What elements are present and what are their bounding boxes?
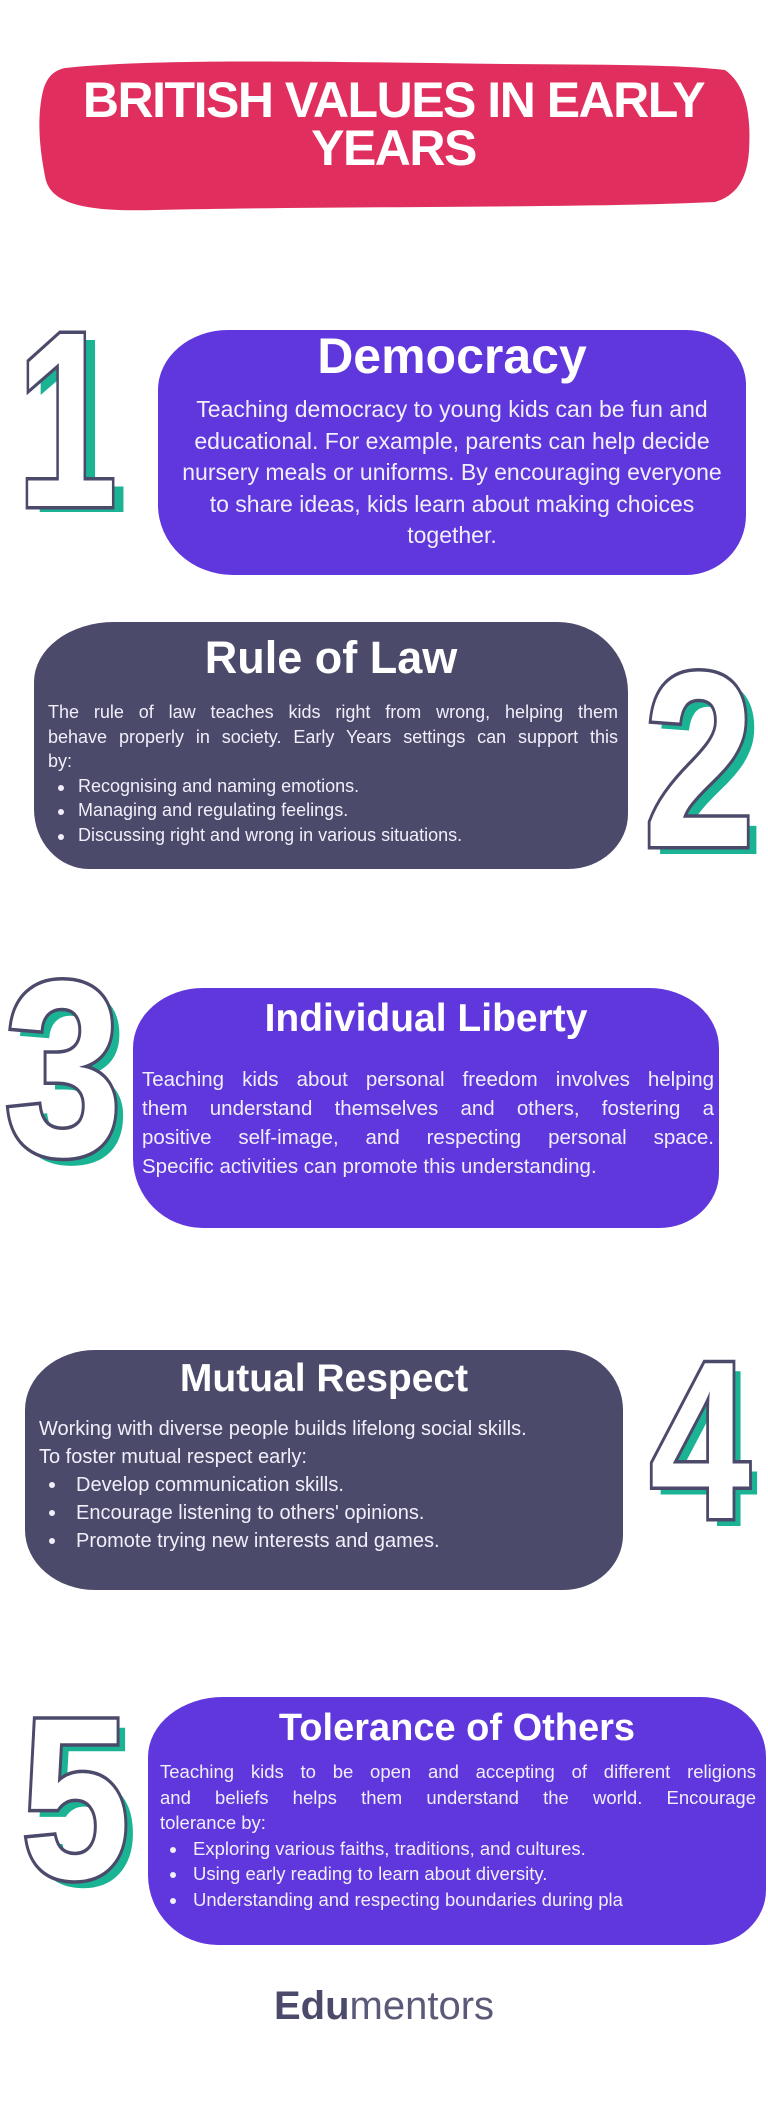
heading: individual liberty: Individual Liberty [265, 997, 587, 1040]
panel: democracy [158, 330, 746, 575]
panel: tolerance of others [148, 1697, 766, 1945]
text: individual liberty: them understand themselves and others, fostering a [142, 1097, 714, 1120]
number 5: 5 [21, 1671, 130, 1928]
number 1: 1 [28, 287, 128, 566]
text: rule of law: behave properly in society. Early Years settings can support this [48, 726, 618, 746]
text: rule of law: Managing and regulating feelings. [78, 800, 348, 820]
text: mutual respect: Promote trying new interests and games. [76, 1530, 440, 1552]
heading: mutual respect: Mutual Respect [180, 1357, 468, 1400]
title banner [39, 62, 750, 210]
heading: rule of law: Rule of Law [205, 632, 457, 683]
number 1: 1 [17, 281, 117, 560]
title text: YEARS [311, 120, 476, 176]
text: mutual respect: Develop communication skills. [76, 1474, 344, 1496]
text: tolerance of others: and beliefs helps them understand the world. Encourage [160, 1786, 756, 1808]
text: individual liberty: Teaching kids about personal freedom involves helping [142, 1068, 714, 1091]
text: democracy: to share ideas, kids learn about making choices [210, 490, 694, 516]
number 3: 3 [4, 930, 122, 1209]
heading: tolerance of others: Tolerance of Others [279, 1707, 635, 1749]
text: individual liberty: positive self-image, and respecting personal space. [142, 1126, 714, 1149]
panel: mutual respect [25, 1350, 623, 1590]
number 3: 3 [13, 938, 131, 1217]
text: tolerance of others: Understanding and respecting boundaries during pla [193, 1888, 623, 1910]
text: mutual respect: To foster mutual respect early: [39, 1446, 307, 1468]
text: democracy: educational. For example, parents can help decide [194, 428, 710, 454]
number 5: 5 [30, 1679, 138, 1936]
text: individual liberty: Specific activities can promote this understanding. [142, 1155, 597, 1178]
text: mutual respect: Working with diverse people builds lifelong social skills. [39, 1418, 527, 1440]
text: tolerance of others: Using early reading to learn about diversity. [193, 1863, 547, 1884]
text: democracy: together. [407, 522, 497, 548]
text: tolerance of others: Teaching kids to be open and accepting of different religions [160, 1761, 756, 1782]
text: rule of law: Recognising and naming emotions. [78, 776, 359, 796]
panel: individual liberty [133, 988, 719, 1228]
text: tolerance of others: tolerance by: [160, 1812, 266, 1833]
text: democracy: Teaching democracy to young kids can be fun and [196, 396, 708, 422]
text: rule of law: Discussing right and wrong in various situations. [78, 824, 462, 844]
text: rule of law: The rule of law teaches kids right from wrong, helping them [48, 702, 618, 722]
number 2: 2 [644, 620, 755, 899]
heading: democracy: Democracy [317, 328, 587, 384]
number 2: 2 [653, 628, 764, 907]
text: tolerance of others [160, 1761, 756, 1910]
number 4: 4 [650, 1316, 750, 1567]
text: democracy: nursery meals or uniforms. By encouraging everyone [182, 459, 722, 485]
text: individual liberty [142, 1068, 714, 1178]
logo: edumentors: Edumentors [274, 1984, 494, 2028]
title text: BRITISH VALUES IN EARLY [83, 72, 704, 128]
panel: rule of law [34, 622, 628, 869]
text: mutual respect: Encourage listening to others' opinions. [76, 1502, 424, 1524]
number 4: 4 [658, 1324, 758, 1575]
text: rule of law [48, 702, 618, 845]
title text [83, 72, 705, 176]
text: democracy [182, 396, 722, 548]
text: rule of law: by: [48, 751, 72, 771]
text: tolerance of others: Exploring various faiths, traditions, and cultures. [193, 1838, 586, 1858]
text: mutual respect [39, 1418, 527, 1552]
